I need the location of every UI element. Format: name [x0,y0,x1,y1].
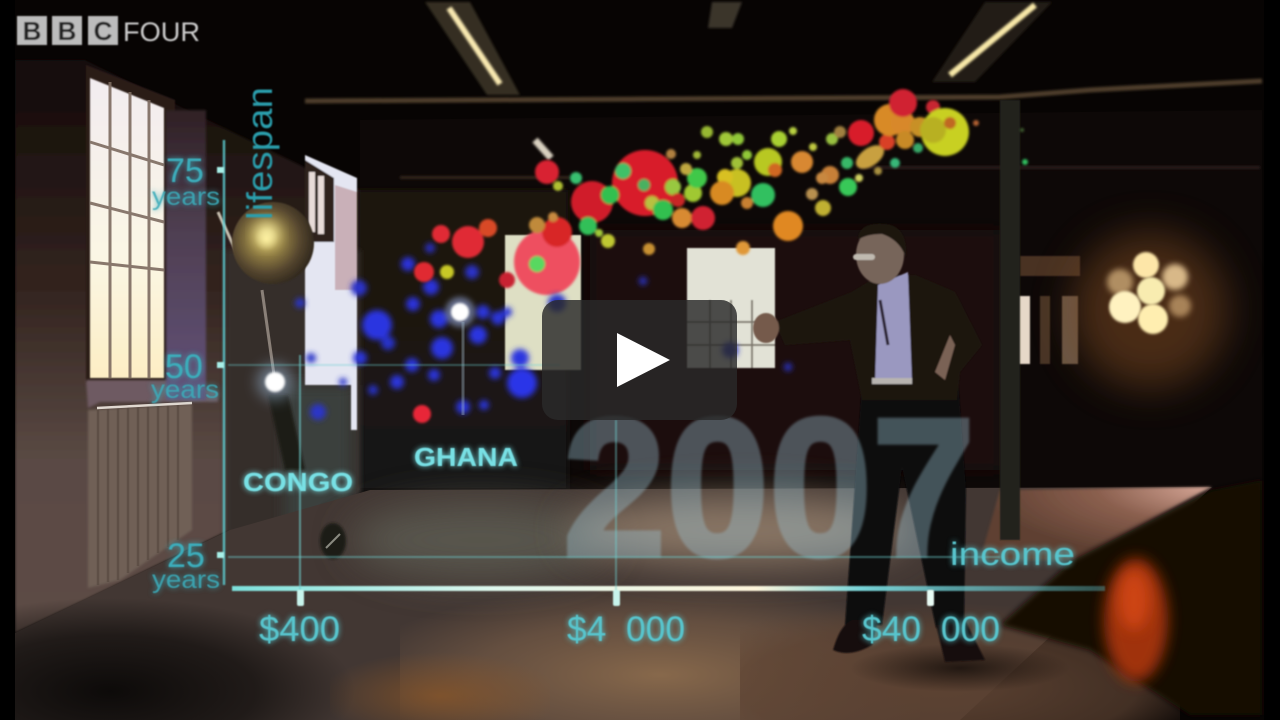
y axis labels: 75 [166,152,204,190]
radiator [88,403,192,588]
highlighted Ghana bubble [445,297,475,415]
dark floor corner with orange reflection [1000,480,1262,715]
year watermark: 2007 [563,378,975,597]
channel logo: BBC Four: B [58,16,76,46]
x axis labels: $40 000 [862,610,1000,649]
y axis title: lifespan [239,87,280,220]
channel logo: BBC Four: B [23,16,41,46]
ceiling beams [305,81,1262,179]
iron pillar [1000,100,1020,540]
bubbles: low-income countries [295,243,792,420]
channel logo: BBC Four: FOUR [123,17,200,47]
y axis labels: years [152,566,220,594]
x axis title: income [950,536,1075,572]
ceiling lights [425,2,1052,158]
country label: Congo: CONGO [243,467,353,497]
x axis labels [259,610,1000,649]
y axis labels: years [152,183,220,211]
second window [305,155,357,430]
presenter [753,224,985,662]
purple brick wall strip [166,110,206,400]
back windows [505,235,1080,370]
y axis labels: years [151,376,219,404]
play button [542,300,737,420]
y axis labels: 50 [165,348,203,386]
x axis labels: $4 000 [567,610,685,649]
left window [86,65,218,408]
channel logo: BBC Four: C [94,16,113,46]
bubbles: red and yellow low-income outliers [413,219,515,423]
bubbles: high-income and mid-income countries [514,89,1028,295]
country label: Ghana: GHANA [414,442,518,472]
chart axes [217,140,1105,606]
spotlight lamp and stand [218,202,346,559]
floor [15,487,1212,720]
y axis labels: 25 [167,537,205,575]
channel logo: BBC Four [17,16,200,47]
x axis labels: $400 [259,610,340,649]
y axis labels [151,152,220,594]
glowing lights cluster [1072,232,1228,388]
